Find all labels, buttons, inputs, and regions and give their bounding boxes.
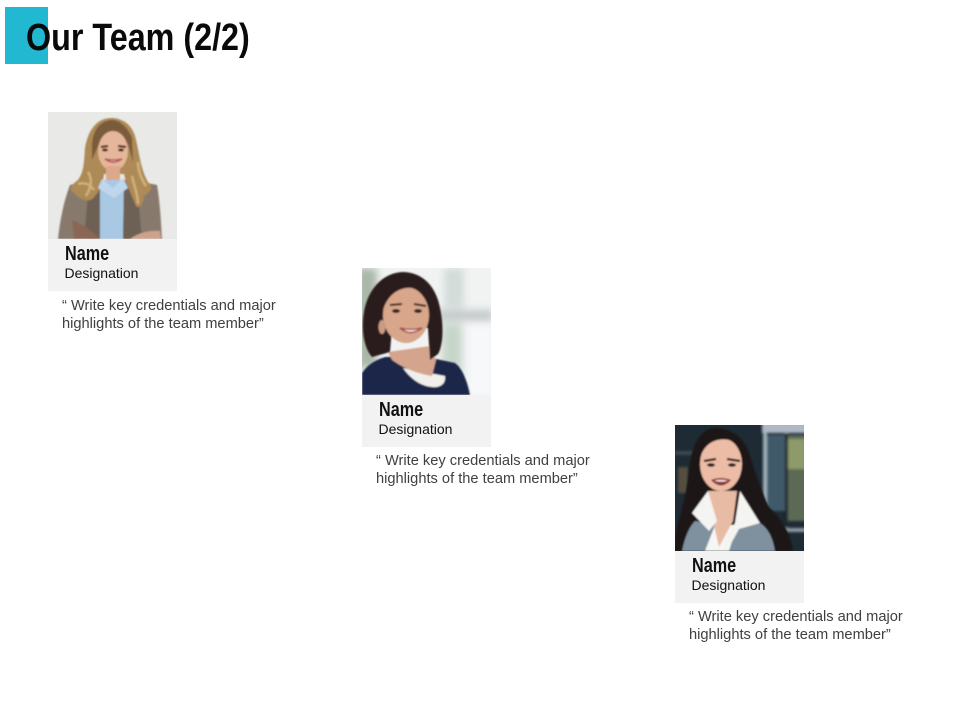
name 2: Name [378, 399, 423, 421]
name band 1 [48, 239, 177, 291]
portrait 1 [48, 112, 177, 239]
credentials 3: highlights of the team member” [689, 627, 891, 643]
name band 2 [362, 395, 491, 447]
credentials 3: “ Write key credentials and major [689, 609, 903, 625]
credentials 3 [689, 609, 903, 643]
team card 2 [362, 268, 491, 447]
credentials 1: “ Write key credentials and major [62, 298, 276, 314]
designation 1: Designation [64, 265, 138, 281]
title: Our Team (2/2) [26, 17, 250, 59]
credentials 2: highlights of the team member” [376, 471, 578, 487]
designation 2: Designation [378, 421, 452, 437]
name 1: Name [64, 243, 109, 265]
credentials 1 [62, 298, 276, 332]
credentials 2 [376, 453, 590, 487]
credentials 1: highlights of the team member” [62, 316, 264, 332]
team card 3 [675, 425, 804, 603]
team card 1 [48, 112, 177, 291]
credentials 2: “ Write key credentials and major [376, 453, 590, 469]
portrait 2 [362, 268, 491, 395]
title accent square [5, 7, 48, 64]
portrait 3 [675, 425, 804, 551]
name band 3 [675, 551, 804, 603]
name 3: Name [692, 555, 736, 577]
designation 3: Designation [692, 577, 765, 593]
